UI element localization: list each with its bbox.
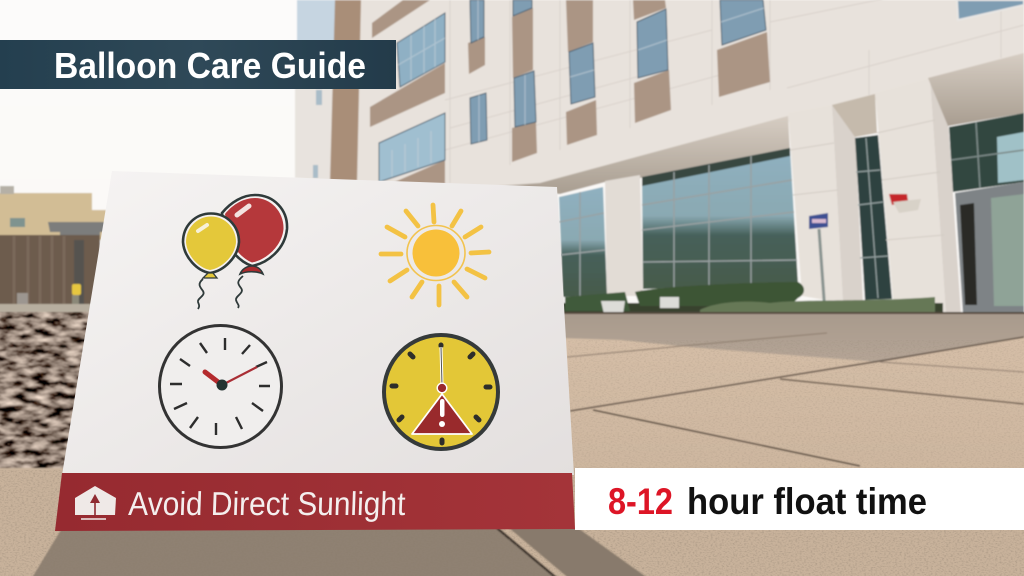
title banner xyxy=(0,40,396,89)
entrance columns xyxy=(605,78,961,314)
paved plaza xyxy=(560,312,1024,473)
blue street sign xyxy=(809,213,828,313)
ground-floor glazing xyxy=(559,148,798,297)
hedges xyxy=(563,282,943,314)
float time callout xyxy=(575,468,1024,530)
brown cladding panels xyxy=(370,0,770,184)
red wall fixture xyxy=(889,194,921,213)
icon: clock xyxy=(160,326,282,448)
right entrance recess with doors xyxy=(928,53,1024,314)
icon: house with up arrow xyxy=(75,486,116,519)
wall panel seams xyxy=(445,0,1024,183)
yellow balloon xyxy=(183,214,239,309)
yellow post xyxy=(72,284,81,312)
upper windows xyxy=(379,0,1024,182)
main building facade xyxy=(295,0,1024,190)
red balloon xyxy=(222,195,287,308)
dirt bed xyxy=(0,312,95,472)
float time text: hour float time xyxy=(687,481,927,522)
sign board xyxy=(55,171,575,531)
footer label: Avoid Direct Sunlight xyxy=(128,485,406,522)
ground-floor overhang xyxy=(470,116,790,194)
icon: sun xyxy=(381,205,489,305)
float time text: 8-12 xyxy=(608,481,673,522)
title text: Balloon Care Guide xyxy=(54,45,366,86)
foreground pavement xyxy=(0,468,1024,576)
icon: warning clock xyxy=(384,335,498,449)
icon: two balloons xyxy=(183,195,287,309)
red footer band xyxy=(55,473,575,531)
left glass and wing xyxy=(295,0,361,182)
brown fence xyxy=(0,235,100,306)
pavement grain texture xyxy=(0,340,1024,576)
distant tan building xyxy=(0,186,110,240)
